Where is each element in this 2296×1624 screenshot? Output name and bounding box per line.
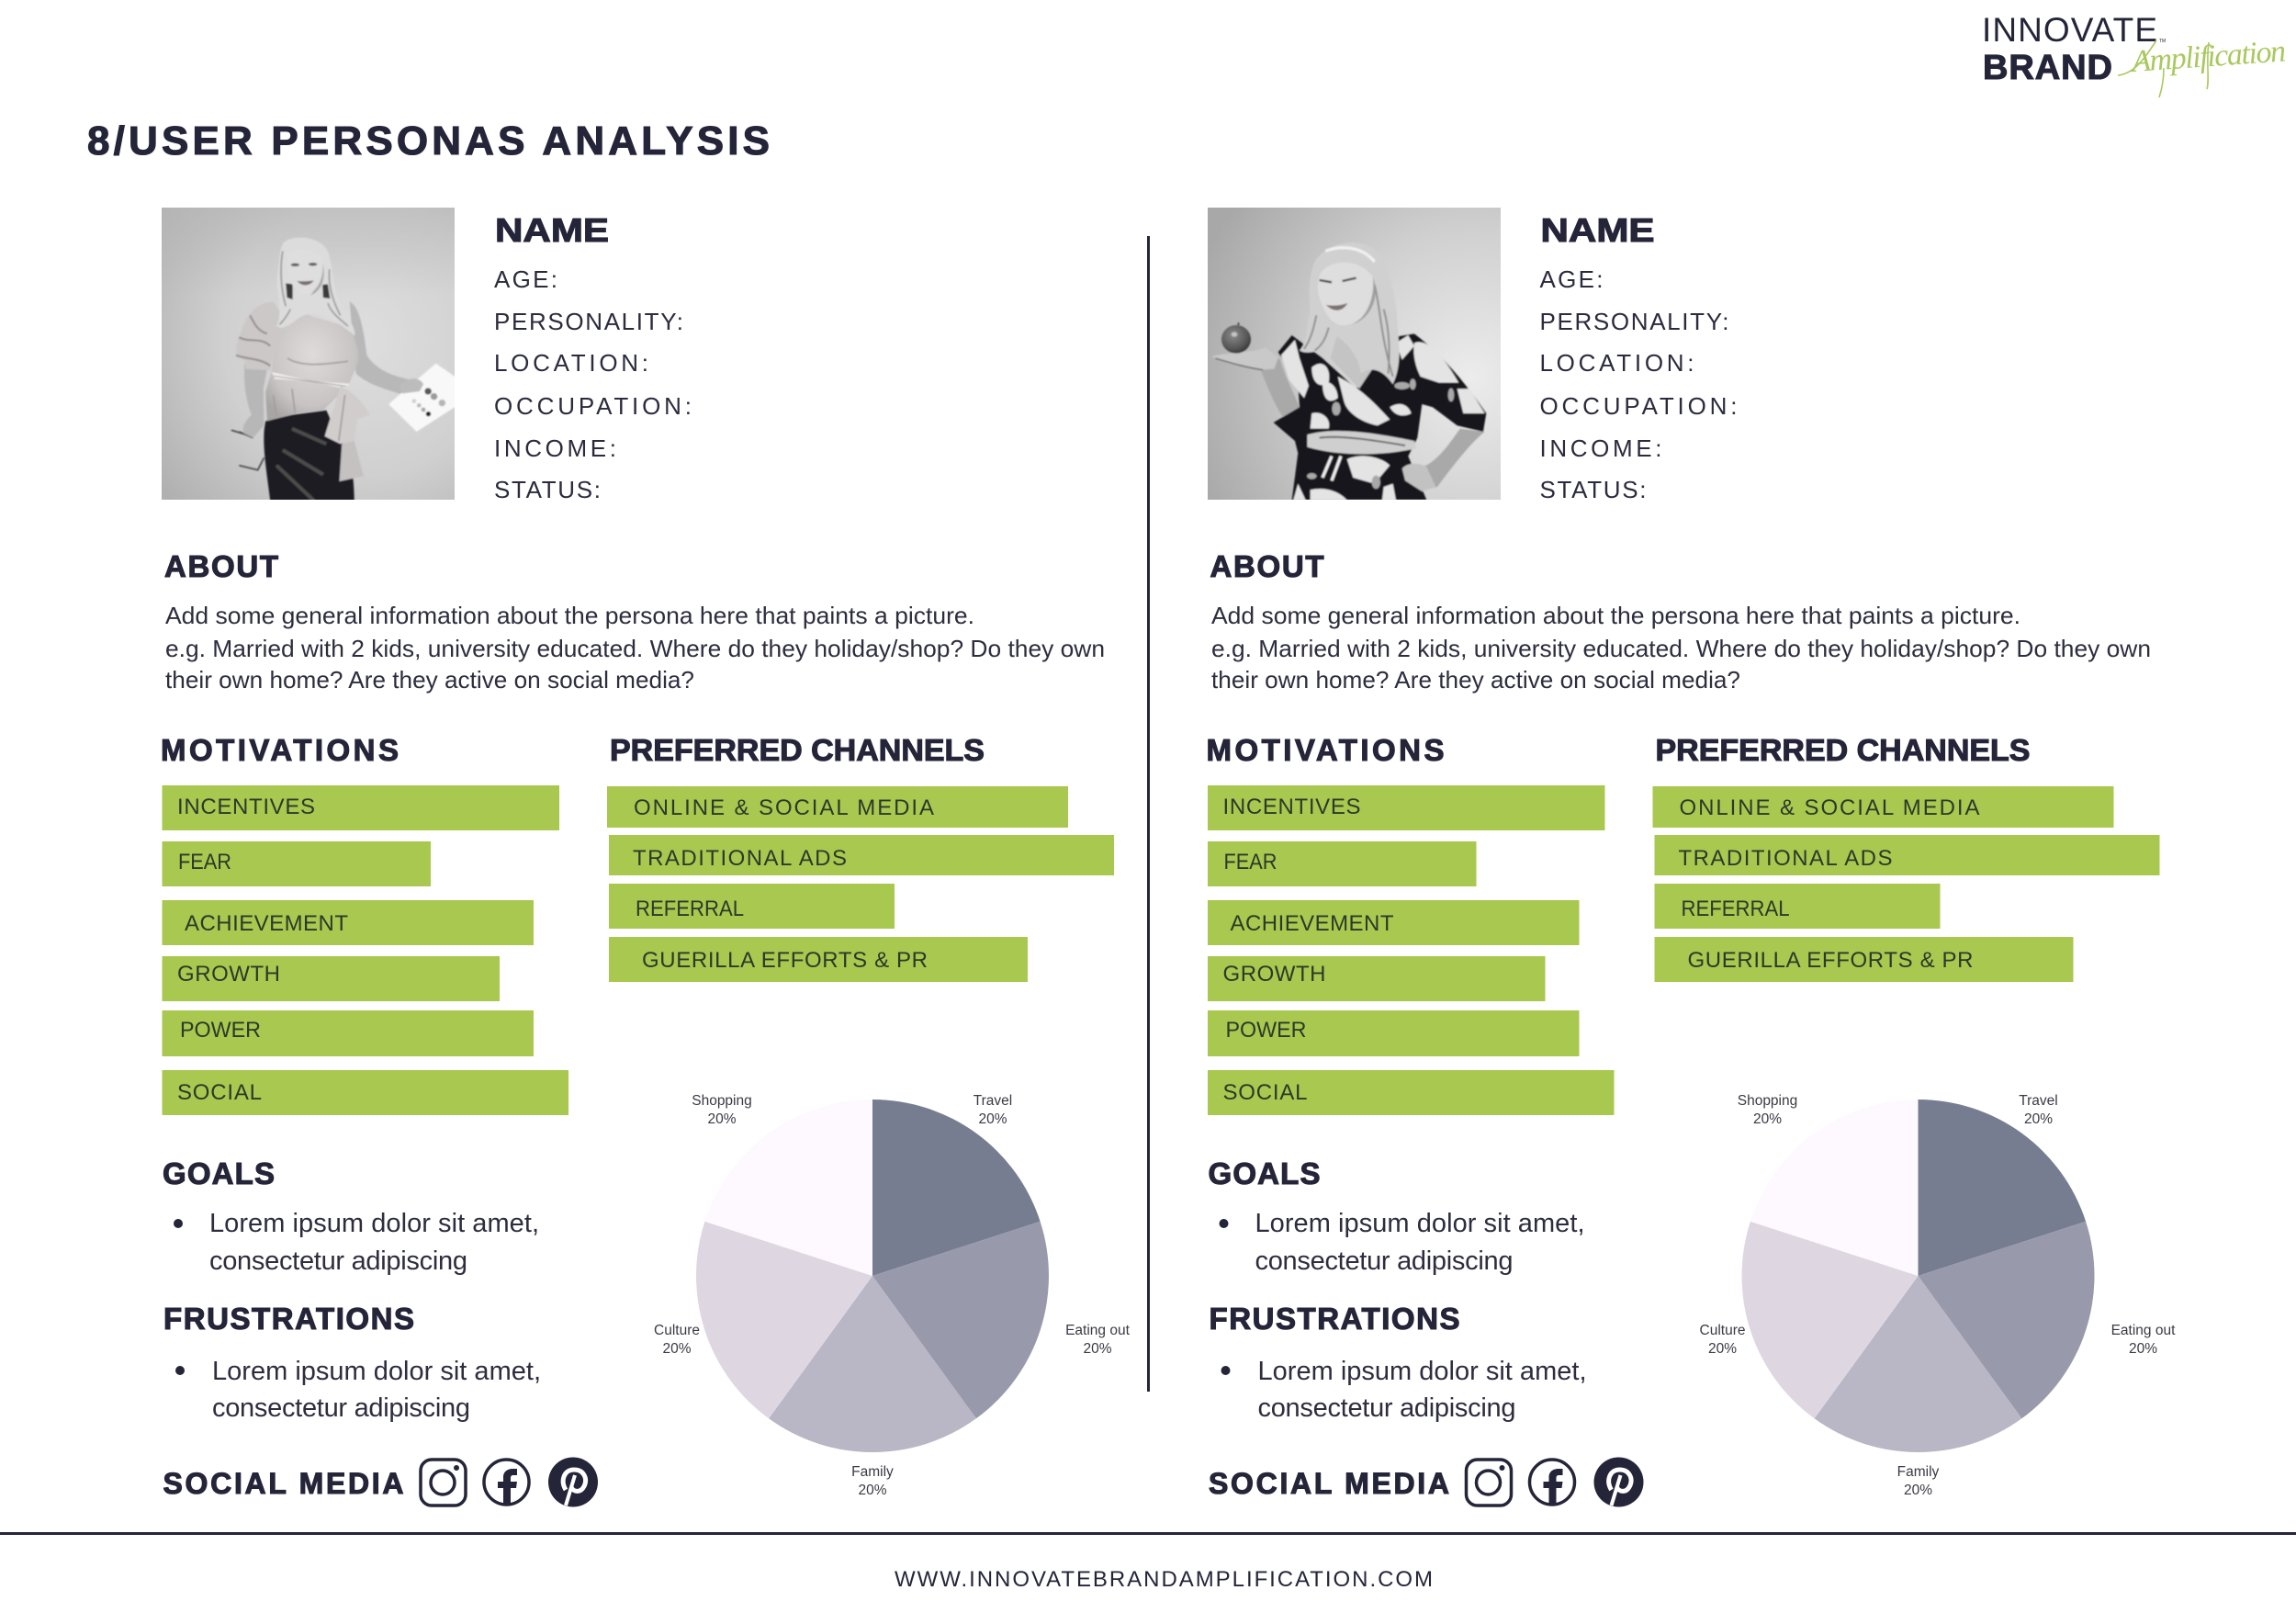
title: 8/USER PERSONAS ANALYSIS xyxy=(87,118,770,164)
pie chart: Travel xyxy=(2019,1093,2058,1109)
about section: Add some general information about the persona here that paints a picture. xyxy=(165,602,974,629)
goals xyxy=(1209,1156,1585,1276)
motivations bars: SOCIAL xyxy=(1223,1080,1308,1105)
logo: Amplification xyxy=(2129,34,2287,79)
preferred channels bars: PREFERRED CHANNELS xyxy=(1655,733,2030,767)
motivations bars: INCENTIVES xyxy=(177,795,315,819)
name and profile fields: STATUS: xyxy=(494,476,601,503)
frustrations: FRUSTRATIONS xyxy=(1209,1302,1460,1336)
footer website url: WWW.INNOVATEBRANDAMPLIFICATION.COM xyxy=(895,1567,1433,1592)
pie chart: Eating out xyxy=(1065,1323,1131,1338)
name and profile fields: PERSONALITY: xyxy=(1539,308,1728,335)
pie chart: Travel xyxy=(974,1093,1012,1109)
photo: woman in floral dress holding an apple xyxy=(1208,208,1501,500)
pie chart: Eating out xyxy=(2111,1323,2176,1338)
name and profile fields: LOCATION: xyxy=(494,349,648,377)
pie chart: Family xyxy=(1897,1464,1940,1480)
about section: their own home? Are they active on social media? xyxy=(1211,666,1740,694)
logo: INNOVATE xyxy=(1982,11,2157,49)
icon: instagram xyxy=(1466,1460,1512,1506)
goals: GOALS xyxy=(163,1156,275,1190)
about section: ABOUT xyxy=(1210,549,1324,583)
name and profile fields xyxy=(494,211,692,503)
icon: pinterest xyxy=(1594,1457,1644,1506)
preferred channels bars: PREFERRED CHANNELS xyxy=(610,733,985,767)
icon: pinterest xyxy=(548,1457,598,1506)
goals xyxy=(163,1156,539,1276)
about section: Add some general information about the persona here that paints a picture. xyxy=(1211,602,2020,629)
motivations bars: FEAR xyxy=(178,850,231,874)
preferred channels bars: ONLINE & SOCIAL MEDIA xyxy=(634,795,934,820)
panel: persona 2 xyxy=(1207,208,2176,1506)
name and profile fields: OCCUPATION: xyxy=(1539,392,1738,420)
pie chart: 20% xyxy=(1083,1341,1112,1357)
footer rule xyxy=(0,1532,2296,1535)
frustrations xyxy=(1209,1302,1587,1423)
icon: instagram xyxy=(421,1460,466,1506)
social media xyxy=(163,1457,598,1506)
about section: e.g. Married with 2 kids, university educated. Where do they holiday/shop? Do they own xyxy=(1211,635,2151,662)
preferred channels bars: TRADITIONAL ADS xyxy=(633,846,847,871)
goals: Lorem ipsum dolor sit amet, xyxy=(1255,1209,1585,1238)
pie chart xyxy=(1700,1093,2176,1498)
motivations bars: ACHIEVEMENT xyxy=(1231,911,1394,936)
pie chart: 20% xyxy=(978,1111,1007,1127)
motivations bars xyxy=(161,733,568,1115)
pie chart: 20% xyxy=(1904,1483,1932,1498)
pie chart: 20% xyxy=(858,1483,887,1498)
motivations bars: GROWTH xyxy=(177,962,280,987)
pie chart: Shopping xyxy=(692,1093,752,1109)
pie chart: Culture xyxy=(654,1323,700,1338)
motivations bars: FEAR xyxy=(1223,850,1277,874)
frustrations: consectetur adipiscing xyxy=(212,1393,470,1423)
pie chart: Culture xyxy=(1700,1323,1745,1338)
goals: consectetur adipiscing xyxy=(209,1246,467,1276)
frustrations: Lorem ipsum dolor sit amet, xyxy=(1258,1357,1587,1386)
pie chart: Family xyxy=(851,1464,894,1480)
social media xyxy=(1209,1457,1644,1506)
frustrations: FRUSTRATIONS xyxy=(163,1302,414,1336)
name and profile fields: OCCUPATION: xyxy=(494,392,692,420)
motivations bars: SOCIAL xyxy=(177,1080,262,1105)
frustrations: consectetur adipiscing xyxy=(1258,1393,1515,1423)
motivations bars: INCENTIVES xyxy=(1223,795,1361,819)
name and profile fields: AGE: xyxy=(494,265,557,293)
name and profile fields: AGE: xyxy=(1539,265,1604,293)
pie chart: 20% xyxy=(662,1341,692,1357)
motivations bars xyxy=(1207,733,1615,1115)
motivations bars: ACHIEVEMENT xyxy=(185,911,348,936)
motivations bars: POWER xyxy=(180,1018,261,1043)
logo: BRAND xyxy=(1983,49,2112,87)
preferred channels bars: REFERRAL xyxy=(636,897,744,921)
about section xyxy=(1210,549,2151,694)
logo: TM xyxy=(2159,39,2166,44)
photo: woman in blouse holding a card xyxy=(162,208,459,501)
frustrations: Lorem ipsum dolor sit amet, xyxy=(212,1357,541,1386)
logo xyxy=(1982,11,2287,97)
social media: SOCIAL MEDIA xyxy=(1209,1467,1449,1500)
name and profile fields: INCOME: xyxy=(1539,434,1662,462)
preferred channels bars: ONLINE & SOCIAL MEDIA xyxy=(1679,795,1980,820)
preferred channels bars: REFERRAL xyxy=(1681,897,1789,921)
about section: e.g. Married with 2 kids, university educated. Where do they holiday/shop? Do they own xyxy=(165,635,1105,662)
motivations bars: POWER xyxy=(1225,1018,1306,1043)
name and profile fields xyxy=(1539,211,1738,503)
goals: Lorem ipsum dolor sit amet, xyxy=(209,1209,539,1238)
preferred channels bars xyxy=(607,733,1114,982)
pie chart xyxy=(654,1093,1131,1498)
pie chart: 20% xyxy=(1708,1341,1737,1357)
name and profile fields: INCOME: xyxy=(494,434,616,462)
icon: facebook xyxy=(484,1460,529,1505)
name and profile fields: LOCATION: xyxy=(1539,349,1694,377)
goals: consectetur adipiscing xyxy=(1255,1246,1514,1276)
pie chart: 20% xyxy=(2024,1111,2053,1127)
social media: SOCIAL MEDIA xyxy=(163,1467,404,1500)
preferred channels bars: TRADITIONAL ADS xyxy=(1679,846,1892,871)
motivations bars: MOTIVATIONS xyxy=(161,733,399,767)
pie chart: 20% xyxy=(707,1111,737,1127)
icon: facebook xyxy=(1530,1460,1574,1505)
pie chart: 20% xyxy=(1753,1111,1782,1127)
preferred channels bars: GUERILLA EFFORTS & PR xyxy=(1688,948,1973,973)
panel: persona 1 xyxy=(161,208,1131,1506)
divider between personas xyxy=(1147,236,1150,1392)
motivations bars: MOTIVATIONS xyxy=(1207,733,1444,767)
about section xyxy=(164,549,1105,694)
goals: GOALS xyxy=(1209,1156,1321,1190)
about section: ABOUT xyxy=(164,549,278,583)
name and profile fields: NAME xyxy=(1541,211,1655,249)
name and profile fields: STATUS: xyxy=(1539,476,1646,503)
pie chart: Shopping xyxy=(1738,1093,1797,1109)
name and profile fields: NAME xyxy=(495,211,609,249)
motivations bars: GROWTH xyxy=(1223,962,1326,987)
frustrations xyxy=(163,1302,541,1423)
preferred channels bars: GUERILLA EFFORTS & PR xyxy=(642,948,928,973)
preferred channels bars xyxy=(1653,733,2160,982)
name and profile fields: PERSONALITY: xyxy=(494,308,683,335)
about section: their own home? Are they active on social media? xyxy=(165,666,694,694)
pie chart: 20% xyxy=(2129,1341,2157,1357)
